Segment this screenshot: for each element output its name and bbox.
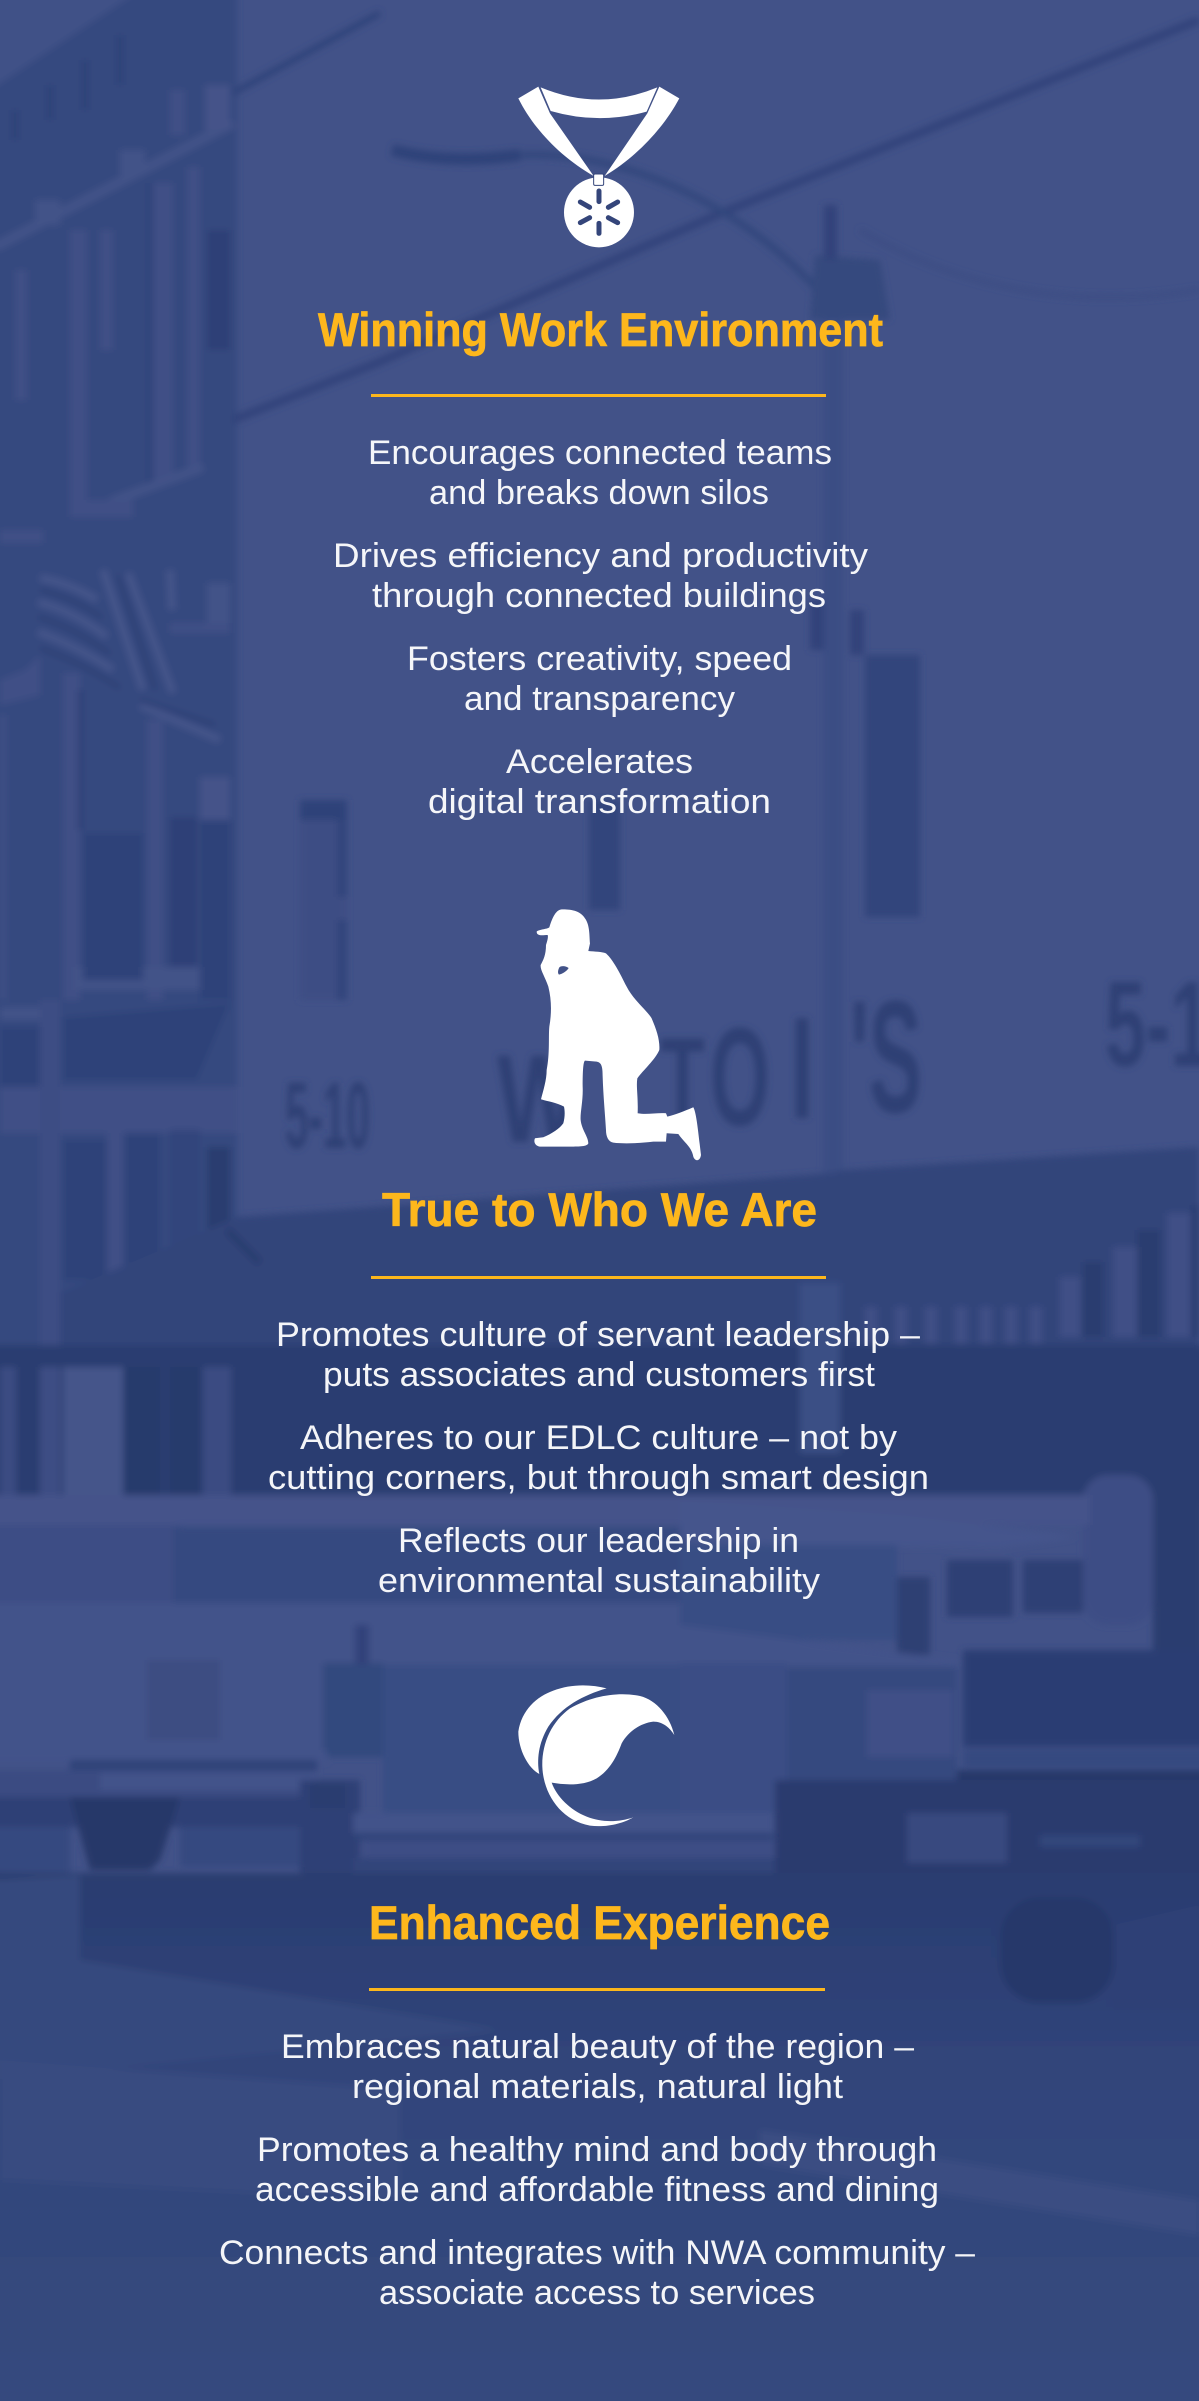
- awning and storefront: [0, 1147, 1199, 1625]
- text block: benefits: through connected buildings: [372, 577, 826, 615]
- text block: benefits: Embraces natural beauty of the region –: [281, 2028, 914, 2066]
- background sign lettering: W: [497, 1030, 580, 1169]
- text block: benefits: puts associates and customers first: [323, 1356, 876, 1394]
- text block: benefits: regional materials, natural light: [352, 2068, 844, 2106]
- text block: benefits: [268, 1316, 929, 1600]
- text block: benefits: and breaks down silos: [429, 474, 769, 512]
- background sign lettering: 5-10: [285, 1063, 370, 1169]
- text block: benefits: cutting corners, but through smart design: [268, 1459, 929, 1497]
- cars: [0, 1480, 1199, 2401]
- text block: benefits: Fosters creativity, speed: [407, 640, 792, 678]
- text block: benefits: Promotes a healthy mind and body through: [257, 2131, 937, 2169]
- icon: medal: [518, 87, 679, 247]
- heading: True to Who We Are: [382, 1183, 817, 1236]
- background sign lettering: [285, 956, 1199, 1169]
- text block: benefits: environmental sustainability: [378, 1562, 820, 1600]
- roof lines and street lamp: [233, 13, 1199, 1450]
- text block: benefits: associate access to services: [379, 2274, 815, 2312]
- background sign lettering: O: [710, 998, 770, 1155]
- text block: benefits: digital transformation: [428, 783, 771, 821]
- heading: Winning Work Environment: [318, 303, 883, 356]
- text block: benefits: Adheres to our EDLC culture – not by: [300, 1419, 897, 1457]
- panel: enhanced experience: [219, 1685, 975, 2312]
- panel: true to who we are: [268, 909, 929, 1600]
- text block: benefits: and transparency: [464, 680, 735, 718]
- center wall windows: [300, 800, 620, 1000]
- icon: kneeling man silhouette: [534, 909, 701, 1160]
- text block: benefits: Drives efficiency and productivity: [333, 537, 868, 575]
- text block: benefits: [219, 2028, 975, 2312]
- icon: leaf: [518, 1685, 674, 1826]
- text block: benefits: Accelerates: [506, 743, 693, 781]
- background sign lettering: T: [660, 1015, 705, 1143]
- heading: Enhanced Experience: [369, 1896, 830, 1949]
- background sign lettering: I: [790, 987, 814, 1149]
- text block: benefits: Connects and integrates with NWA community –: [219, 2234, 975, 2272]
- text block: benefits: Reflects our leadership in: [398, 1522, 799, 1560]
- text block: benefits: [333, 434, 868, 821]
- text block: benefits: Promotes culture of servant leadership –: [276, 1316, 920, 1354]
- text block: benefits: accessible and affordable fitness and dining: [255, 2171, 939, 2209]
- panel: winning work environment: [318, 87, 883, 821]
- text block: benefits: Encourages connected teams: [368, 434, 832, 472]
- background sign lettering: 'S: [850, 967, 922, 1146]
- left building: [0, 0, 237, 1500]
